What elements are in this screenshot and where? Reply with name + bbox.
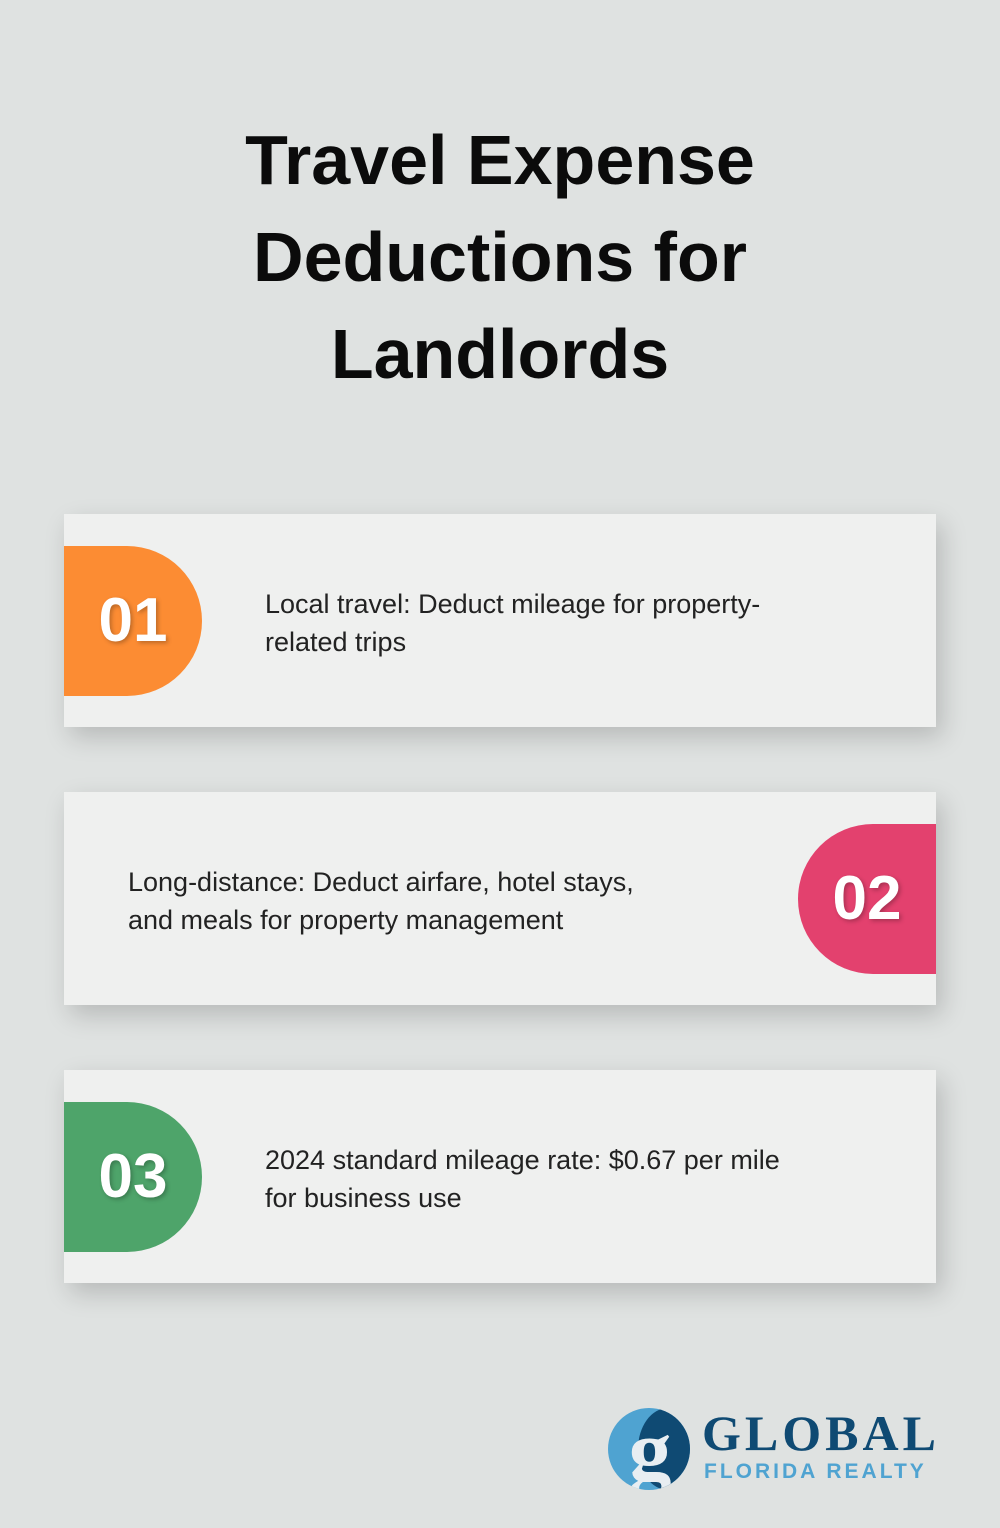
icon: g circle (608, 1408, 690, 1490)
card 2 (64, 792, 936, 1005)
text 2: Long-distance: Deduct airfare, hotel stays, and meals for property management (128, 867, 634, 935)
badge 03: 03 (99, 1142, 167, 1211)
logo text: GLOBAL (702, 1405, 940, 1461)
badge 03 (64, 1102, 202, 1252)
text 3: 2024 standard mileage rate: $0.67 per mile for business use (265, 1145, 780, 1213)
logo: FLORIDA REALTY (704, 1460, 927, 1483)
logo (608, 1405, 940, 1490)
title: Travel Expense (245, 121, 755, 199)
badge 02: 02 (833, 864, 901, 933)
text 1: Local travel: Deduct mileage for property-related trips (265, 589, 760, 657)
card 3 (64, 1070, 936, 1283)
badge 01 (64, 546, 202, 696)
card 1 (64, 514, 936, 727)
badge 02 (798, 824, 936, 974)
title: Deductions for (253, 218, 747, 296)
title: Landlords (331, 315, 669, 393)
title (245, 121, 755, 393)
badge 01: 01 (99, 586, 167, 655)
